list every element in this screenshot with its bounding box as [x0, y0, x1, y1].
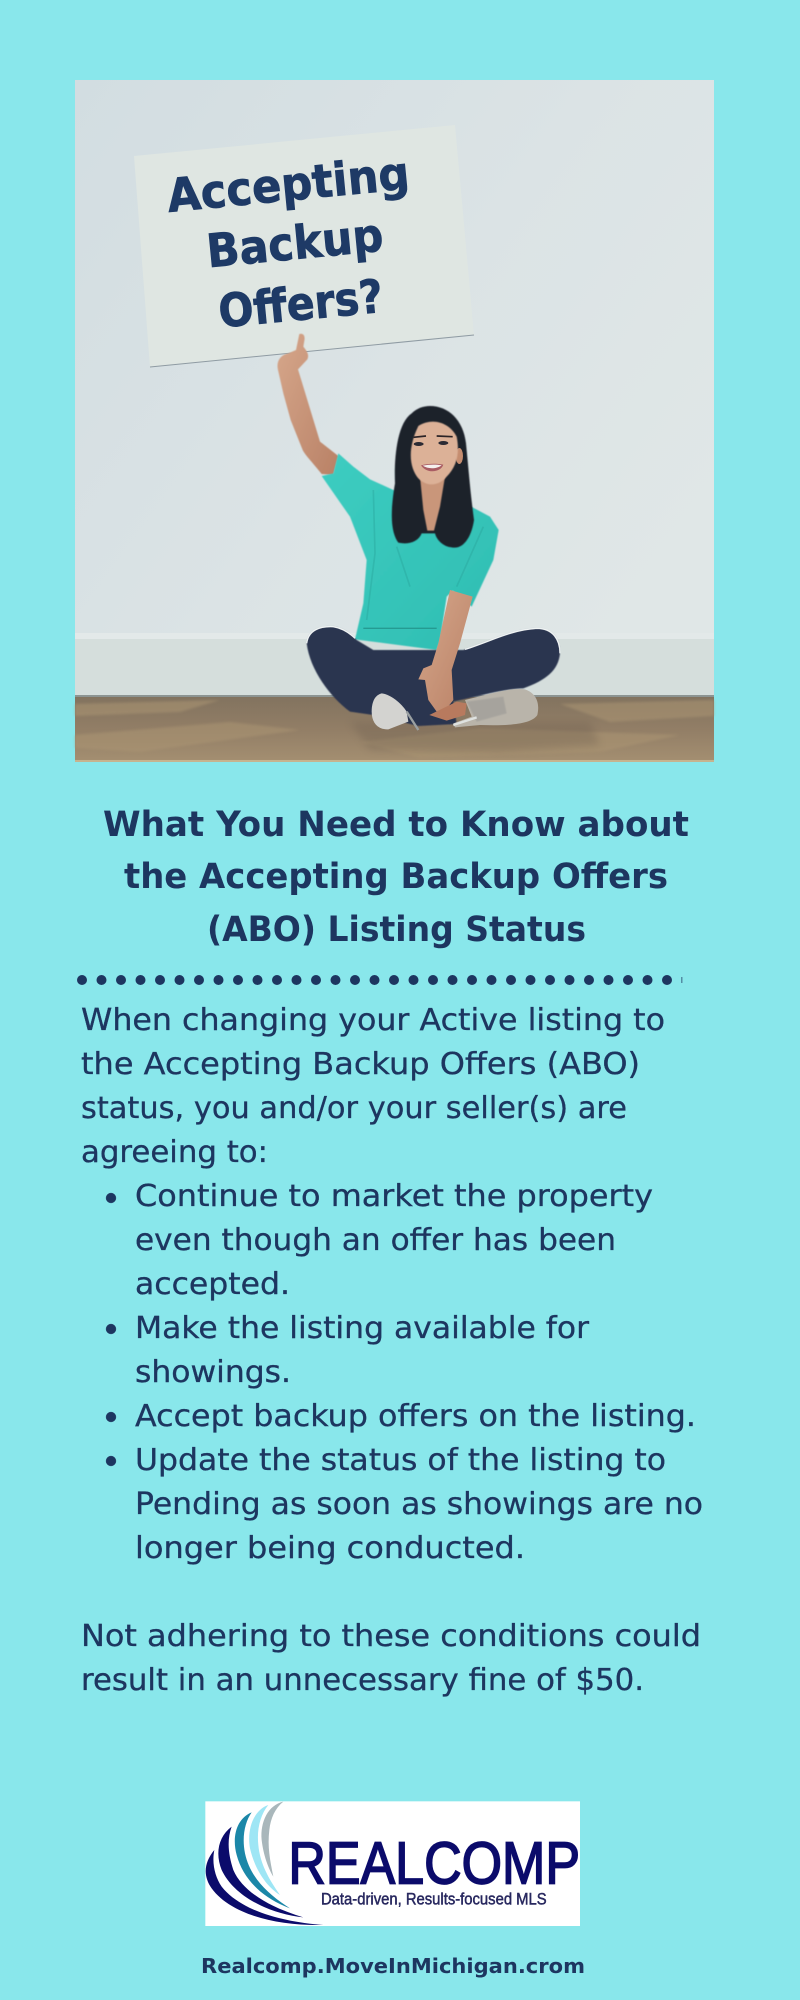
neck — [420, 477, 445, 531]
woman legs and shoes — [307, 590, 560, 730]
sign text: Accepting — [165, 146, 412, 223]
dotted divider — [82, 977, 682, 983]
title: the Accepting Backup Offers — [124, 857, 668, 897]
bullet 1: even though an offer has been — [135, 1223, 616, 1258]
ankle — [429, 702, 467, 721]
jeans — [307, 627, 560, 726]
intro paragraph — [81, 1003, 665, 1170]
bullet 2: showings. — [135, 1355, 291, 1390]
title: What You Need to Know about — [103, 805, 689, 845]
ear — [456, 448, 463, 464]
bullet 1: Continue to market the property — [135, 1179, 653, 1214]
footer URL: Realcomp.MoveInMichigan.crom — [201, 1954, 585, 1978]
bullet 3: Accept backup offers on the listing. — [135, 1399, 696, 1434]
Realcomp logo — [205, 1801, 580, 1926]
wooden floor — [75, 697, 714, 762]
bullet 4: Update the status of the listing to — [135, 1443, 666, 1478]
bullet 1: accepted. — [135, 1267, 290, 1302]
bullet 2: Make the listing available for — [135, 1311, 590, 1346]
logo wordmark: REALCOMP — [288, 1829, 580, 1896]
intro paragraph: agreeing to: — [81, 1135, 268, 1170]
title: (ABO) Listing Status — [207, 910, 586, 950]
sign text — [165, 146, 423, 342]
intro paragraph: the Accepting Backup Offers (ABO) — [81, 1047, 640, 1082]
sign board — [134, 125, 474, 367]
bullet list — [106, 1179, 703, 1566]
logo swooshes — [206, 1802, 323, 1925]
shirt — [322, 453, 499, 650]
bullet 1 — [106, 1179, 653, 1302]
bullet 4: Pending as soon as showings are no — [135, 1487, 703, 1522]
sign text: Backup — [204, 208, 385, 278]
hair back — [392, 406, 474, 548]
bullet 4 — [106, 1443, 703, 1566]
bullet 2 — [106, 1311, 590, 1390]
eyes and brows — [413, 436, 453, 446]
logo tagline: Data-driven, Results-focused MLS — [321, 1889, 547, 1908]
left shoe — [372, 693, 418, 730]
bullet 4: longer being conducted. — [135, 1531, 525, 1566]
face — [411, 422, 458, 484]
title — [103, 805, 689, 950]
smile — [421, 464, 443, 471]
fine warning: result in an unnecessary fine of $50. — [81, 1663, 644, 1698]
forearm and hand — [418, 590, 473, 712]
fine warning — [81, 1619, 701, 1698]
intro paragraph: status, you and/or your seller(s) are — [81, 1091, 627, 1126]
fine warning: Not adhering to these conditions could — [81, 1619, 701, 1654]
sign text: Offers? — [216, 269, 385, 339]
photo: woman holding sign — [75, 80, 714, 762]
raised arm and hand — [277, 334, 338, 475]
wall — [75, 80, 714, 697]
intro paragraph: When changing your Active listing to — [81, 1003, 665, 1038]
right shoe — [453, 689, 538, 727]
woman upper body — [277, 334, 499, 650]
baseboard — [75, 633, 714, 697]
